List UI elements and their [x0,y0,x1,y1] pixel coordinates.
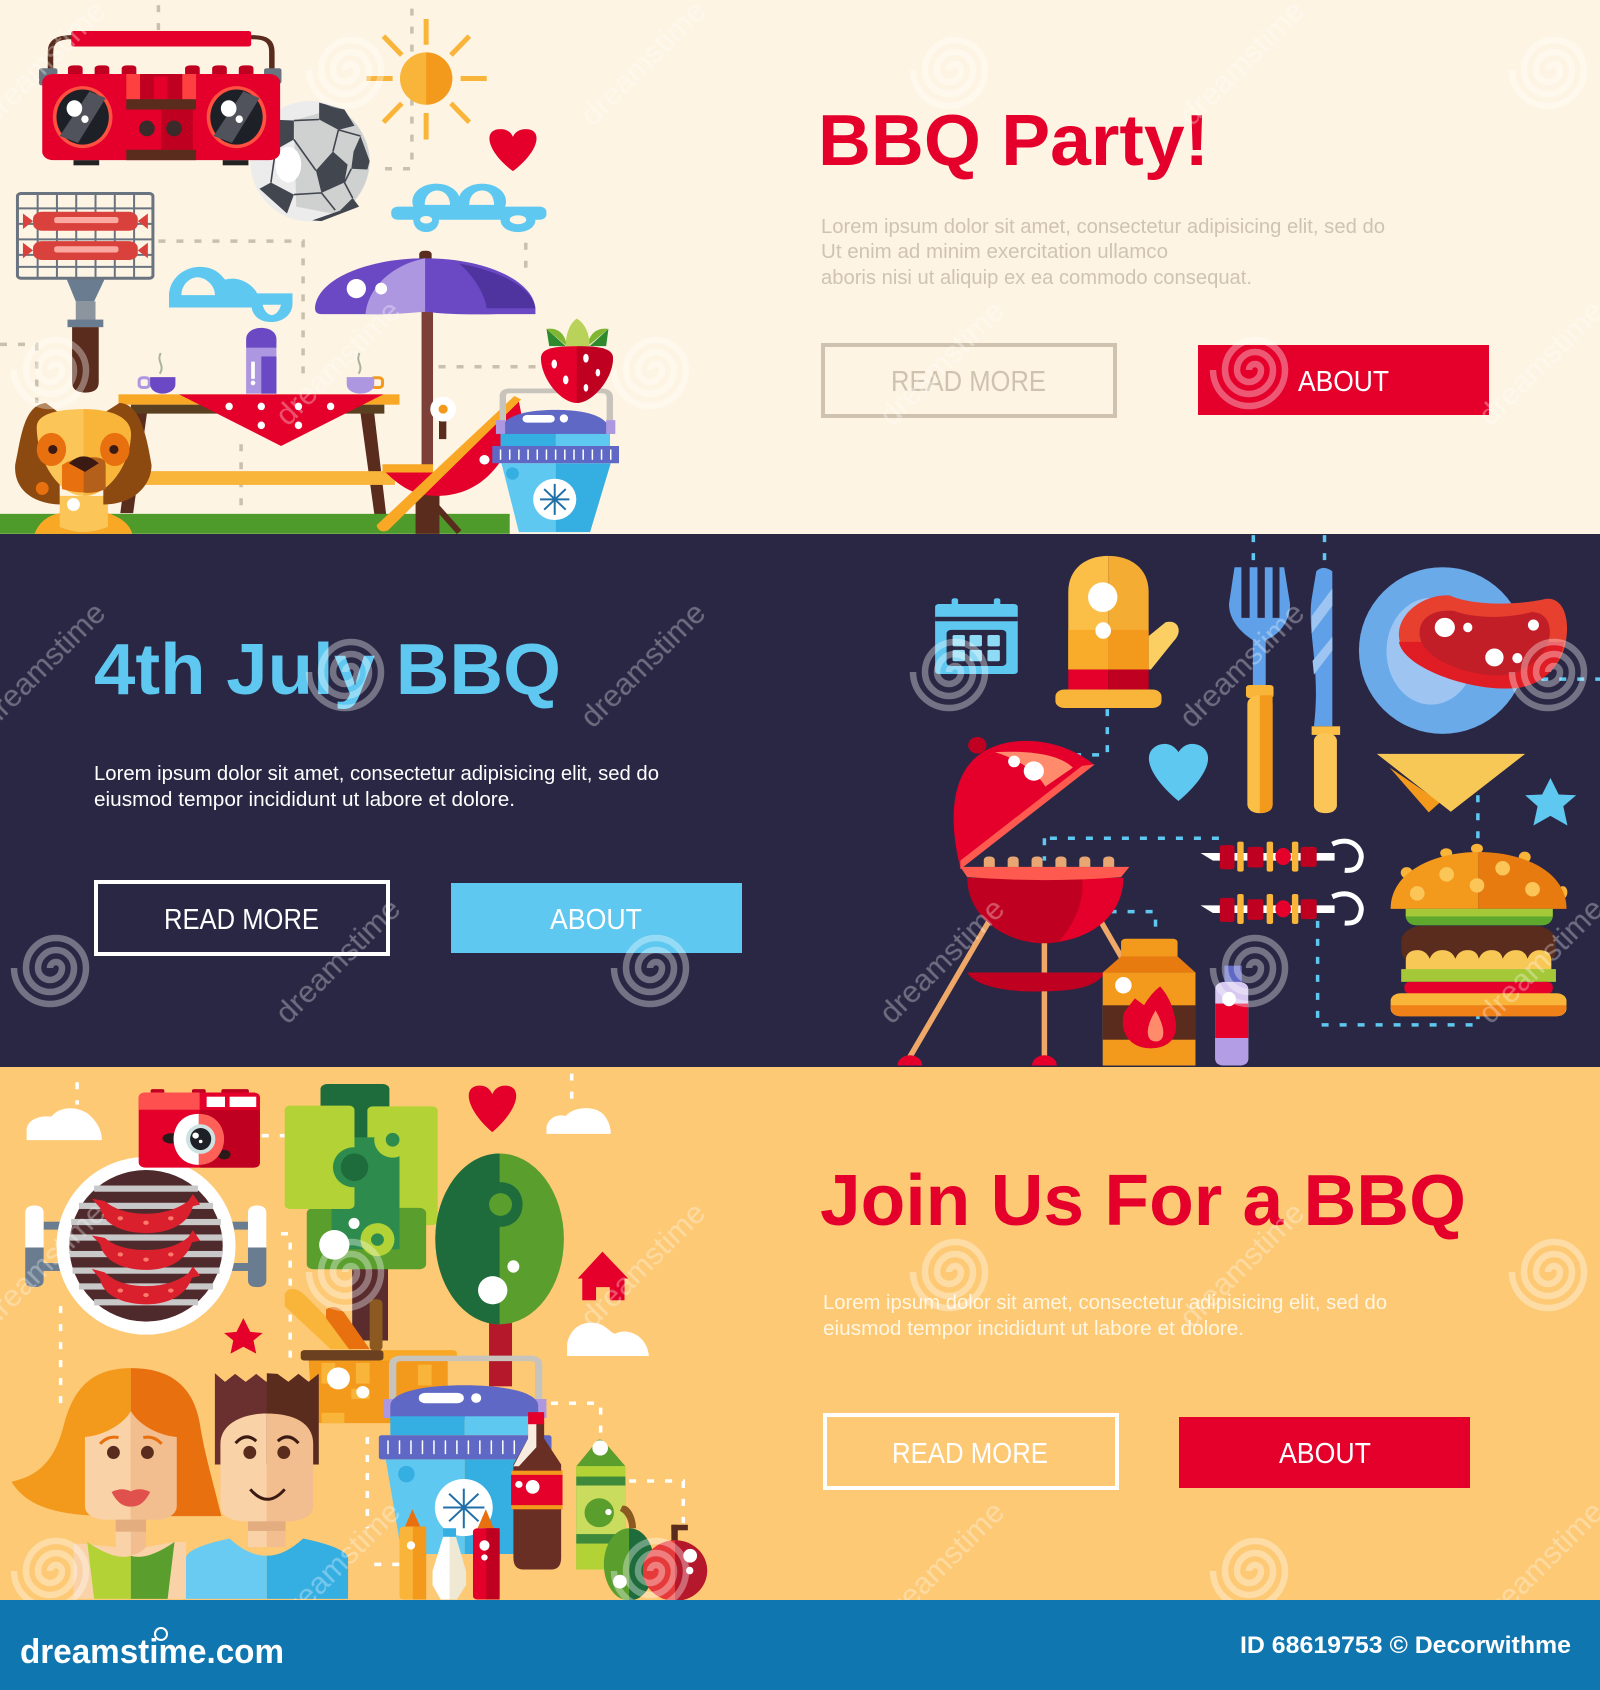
icon: blue star [1525,778,1576,825]
watermark: spirals and wordmarks: dreamstime [872,891,1011,1030]
icon: oven mitt [1055,556,1179,708]
button: about [1198,345,1489,415]
icon: condiment bottles [400,1509,500,1600]
icon: juice carton [576,1440,625,1570]
title: Join Us For a BBQ: Join Us For a BBQ [820,1161,1466,1241]
icon: red heart [469,1086,516,1132]
icon: deck chair [377,396,521,534]
icon: woman [11,1368,221,1599]
icon: cola bottle [511,1412,563,1570]
button: about: ABOUT [1298,366,1389,398]
icon: boombox [39,31,281,165]
icon: pepper and apple [604,1506,707,1601]
icon: fork [1229,567,1290,813]
paragraph: lorem ipsum: eiusmod tempor incididunt ut labore et dolore. [94,789,515,811]
icon: cooler [379,1358,551,1554]
watermark: spirals and wordmarks: dreamstime [268,293,407,432]
icon: strawberry [541,319,613,403]
ground: grass [0,514,510,534]
illustration: friends picnic scene [11,1074,707,1601]
button: about [1179,1417,1470,1488]
panel: BBQ Party banner background [0,0,1600,534]
icon: sun [366,19,487,139]
watermark: spirals and wordmarks: dreamstime [268,891,407,1030]
icon: round tree [435,1154,564,1386]
icon: kettle grill [897,737,1129,1066]
text block: 4th July banner [94,630,742,954]
watermark: spirals and wordmarks: dreamstime [573,595,712,734]
credit text: ID 68619753 © Decorwithme [1240,1632,1571,1659]
icon: blue cloud 2 [169,267,293,322]
watermark: spirals and wordmarks: dreamstime [573,1195,712,1334]
illustration: BBQ party scene [0,5,619,534]
button: read more [825,1415,1117,1488]
footer bar [0,1600,1600,1690]
paragraph: lorem ipsum [823,1292,1387,1340]
button: about [451,883,742,953]
icon: grill basket with sausages [17,194,153,393]
paragraph: lorem ipsum: Lorem ipsum dolor sit amet, consectetur adipisicing elit, sed do [94,763,659,785]
icon: soccer ball [250,101,370,221]
paragraph: lorem ipsum: Lorem ipsum dolor sit amet, consectetur adipisicing elit, sed do [823,1292,1387,1314]
paragraph: lorem ipsum: eiusmod tempor incididunt ut labore et dolore. [823,1318,1244,1340]
watermark: spirals and wordmarks: dreamstime [1172,595,1311,734]
button: read more: READ MORE [164,904,319,936]
title: 4th July BBQ: 4th July BBQ [94,630,561,710]
illustration: grill and food icons [897,535,1600,1066]
icon: house [578,1252,628,1300]
watermark: spirals and wordmarks: dreamstime [872,293,1011,432]
icon: white clouds [27,1108,649,1356]
title: BBQ Party: BBQ Party! [818,101,1209,181]
icon: blue heart [1149,744,1208,801]
icon: knife [1311,568,1340,813]
icon: thermos [246,328,276,394]
watermark: spirals and wordmarks: dreamstime [268,1494,407,1633]
icon: blue cloud [391,184,546,232]
logo: dreamstime.com: dreamstime.com [20,1633,284,1671]
icon: man [186,1373,348,1599]
icon: egg on stick [430,397,456,439]
watermark: spirals and wordmarks: dreamstime [1172,1195,1311,1334]
button: read more: READ MORE [891,366,1046,398]
icon: picnic table [118,394,400,530]
paragraph: lorem ipsum: aboris nisi ut aliquip ex ea commodo consequat. [821,267,1252,289]
icon: napkin [1377,754,1525,812]
icon: calendar [935,598,1018,674]
button: about: ABOUT [1279,1438,1371,1470]
icon: small sauce bottle [1215,966,1248,1066]
paragraph: lorem ipsum: Ut enim ad minim exercitation ullamco [821,241,1168,263]
button: read more [96,882,388,954]
icon: dog [15,403,152,534]
icon: kebab skewers [1201,841,1361,924]
icon: picnic basket with baguettes [285,1289,457,1423]
text block: BBQ Party banner [818,101,1489,416]
icon: cooler bag [492,391,619,532]
icon: coffee cups [139,353,383,394]
icon: beach umbrella [315,251,535,465]
icon: square tree [285,1084,438,1341]
text block: Join Us banner [820,1161,1470,1488]
icon: burger [1391,844,1567,1016]
watermark: spirals and wordmarks: dreamstime [872,1494,1011,1633]
icon: round grill with sausages [25,1157,266,1335]
icon: red star [224,1318,263,1354]
paragraph: lorem ipsum [94,763,659,811]
button: read more: READ MORE [892,1438,1048,1470]
panel: Join Us banner background [0,1067,1600,1600]
icon: heart [489,129,537,171]
icon: fire starter bottle [1103,939,1195,1066]
button: about: ABOUT [550,904,642,936]
paragraph: lorem ipsum: Lorem ipsum dolor sit amet, consectetur adipisicing elit, sed do [821,216,1385,238]
panel: 4th July banner background [0,534,1600,1067]
button: read more [823,345,1115,416]
icon: plate with steak [1359,567,1567,734]
paragraph: lorem ipsum [821,216,1385,289]
icon: camera [139,1089,260,1168]
